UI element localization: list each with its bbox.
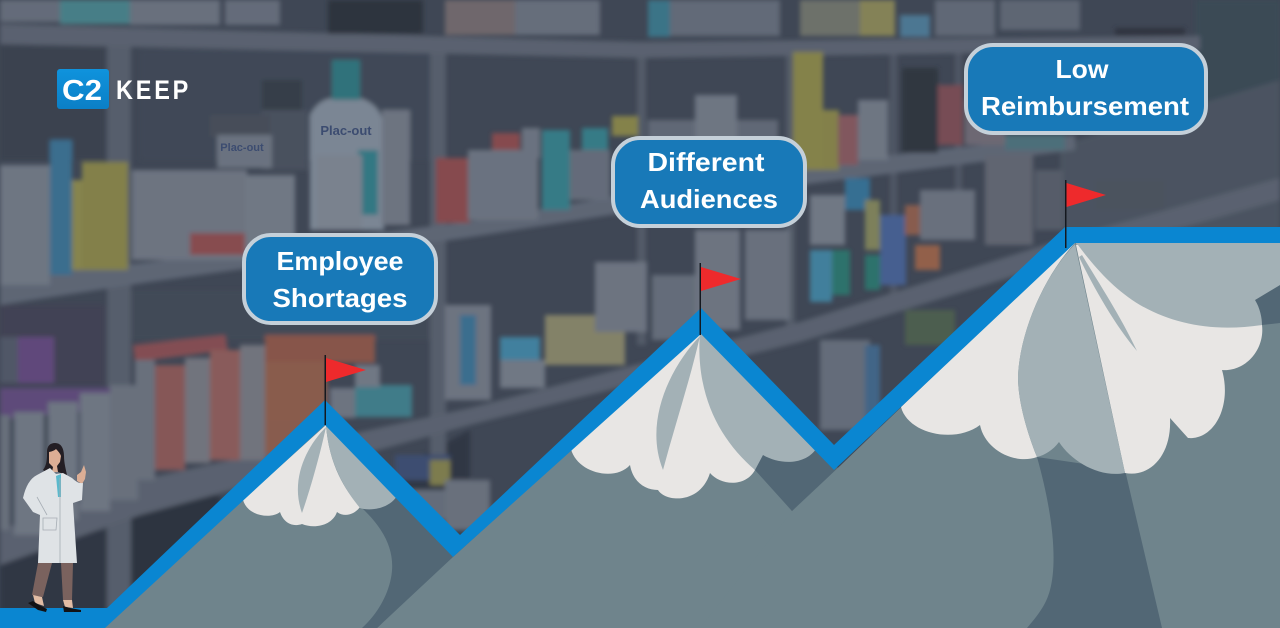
mountain 3 right shade — [1075, 240, 1280, 345]
mountain 3 — [700, 240, 1280, 628]
vertical posts — [107, 40, 131, 610]
mountain 1 snow shade — [326, 424, 397, 509]
mountain 1 shaded side — [300, 420, 458, 628]
label: Employee Shortages: Shortages — [272, 283, 408, 313]
pharmacist character — [23, 443, 86, 612]
shoes — [28, 601, 81, 612]
feet — [33, 595, 73, 608]
logo badge — [57, 69, 109, 109]
mid column row 2 — [132, 170, 247, 260]
scrubs — [56, 474, 61, 497]
label: Low Reimbursement: Low — [1056, 54, 1109, 84]
logo — [57, 69, 191, 109]
mountain 3 left snow — [901, 242, 1075, 459]
shelves — [0, 24, 1200, 58]
hair back — [43, 443, 67, 475]
bottle label text: Plac-out — [320, 123, 372, 138]
mountain 3 dark trunk — [1027, 457, 1162, 628]
label: Employee Shortages — [244, 235, 436, 323]
mountain 1 snow sliver — [298, 427, 326, 513]
mountain 2 snow sliver — [656, 336, 700, 470]
row 3 left — [18, 337, 54, 383]
mountain 3 center shade — [1018, 244, 1125, 474]
mountain 2 snow — [571, 333, 755, 498]
mountain 3 lit face — [700, 240, 1280, 628]
mid column right — [436, 158, 470, 223]
flag 1 — [324, 355, 366, 425]
logo C2: C2 — [62, 75, 102, 107]
mountain 2 lit face — [377, 331, 840, 628]
mountain 2 snow shade — [699, 332, 816, 470]
label: Employee Shortages: Employee — [276, 246, 404, 276]
flag 3 — [1065, 180, 1106, 248]
left column row 2 — [0, 165, 50, 285]
label: Low Reimbursement — [966, 45, 1206, 133]
label: Different Audiences — [613, 138, 805, 226]
mountain 1 lit face — [104, 422, 392, 628]
label: Different Audiences: Different — [648, 147, 765, 177]
coat details — [37, 478, 60, 563]
row 2 col 3/4 — [648, 120, 778, 150]
legs — [32, 563, 73, 600]
blue ascent line — [0, 227, 1280, 628]
mountain 3 right dark patch — [1255, 285, 1280, 325]
coat — [23, 468, 83, 563]
background: blurred pharmacy shelves: Plac-out — [220, 142, 264, 154]
row 3 col 2 — [445, 305, 491, 400]
mountain 2 shaded side — [690, 330, 840, 511]
mountain 1 snow — [243, 425, 360, 526]
mountain 1 — [104, 420, 458, 628]
face — [49, 449, 61, 472]
flag 2 — [700, 263, 741, 335]
lower — [905, 310, 955, 345]
logo KEEP: KEEP — [116, 76, 191, 105]
plac-out bottle — [310, 98, 384, 230]
hand raised — [77, 465, 86, 484]
mountain 2 — [377, 330, 840, 628]
label: Low Reimbursement: Reimbursement — [981, 91, 1189, 121]
mountain 3 right snow — [1076, 245, 1262, 474]
mountain 3 snow sliver — [1079, 255, 1137, 351]
row 3 red stacks — [133, 335, 228, 362]
row 3 col 3 — [652, 275, 698, 340]
label: Different Audiences: Audiences — [640, 184, 778, 214]
top row — [0, 0, 60, 22]
